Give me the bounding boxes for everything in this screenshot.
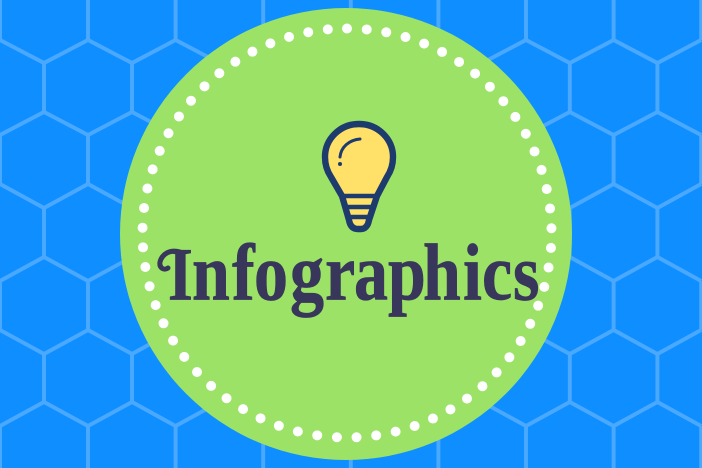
title: Infographics: I — [168, 234, 193, 317]
green circle badge — [120, 8, 572, 460]
title: Infographics: nfographics — [192, 229, 539, 318]
dotted white ring — [142, 28, 552, 438]
icon: light bulb — [325, 124, 393, 229]
title swash on capital I — [160, 251, 180, 269]
